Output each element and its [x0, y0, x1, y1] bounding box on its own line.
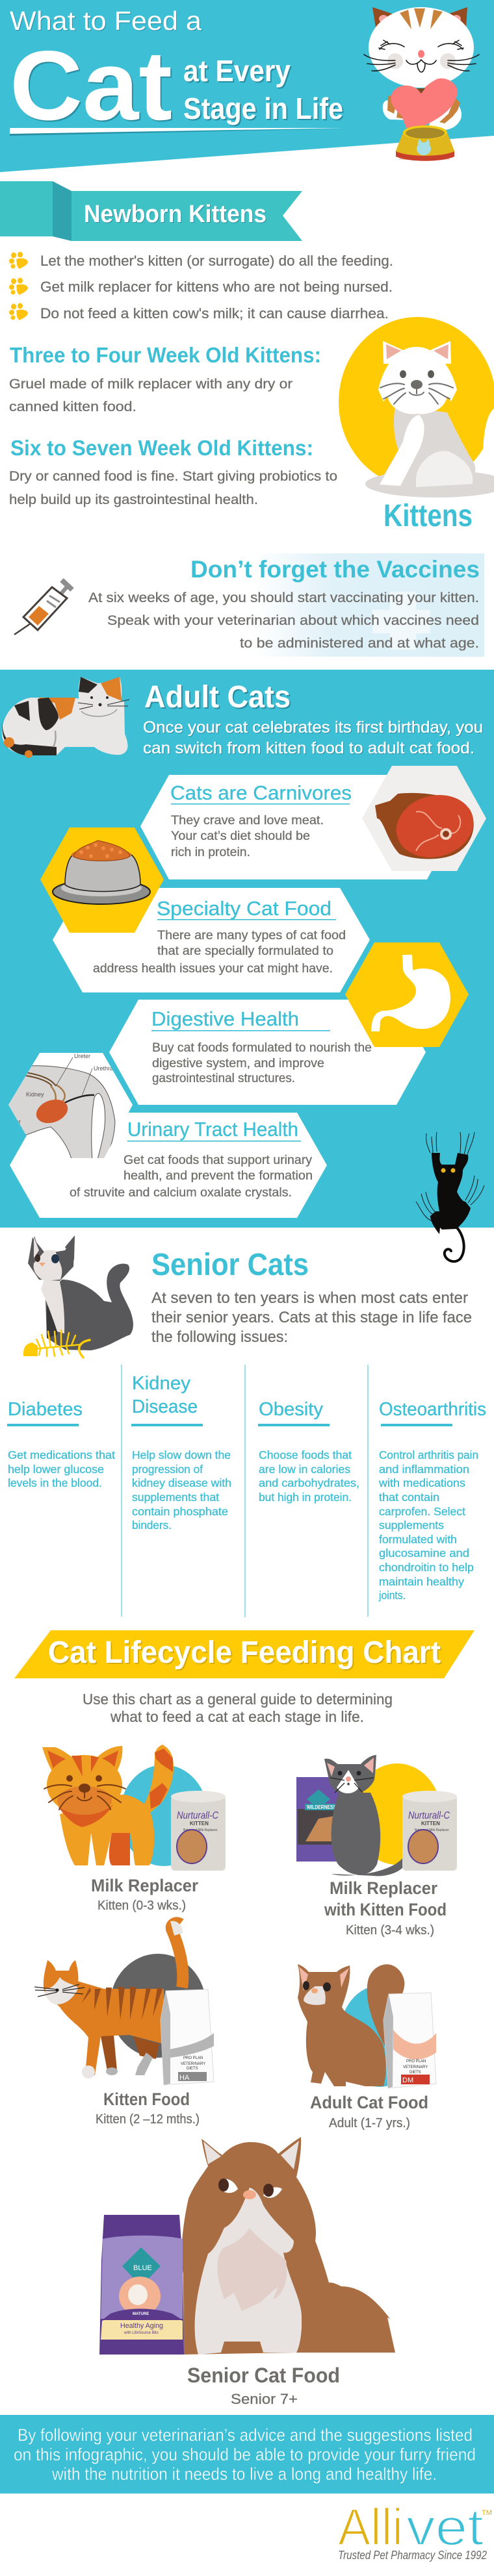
column: Kidney Disease: supplements that: [132, 1491, 219, 1504]
icon: white food bag: PRO PLAN: [406, 2060, 426, 2064]
text block: senior cats: At seven to ten years is when most cats enter: [151, 1289, 468, 1307]
sublabel: Adult (1-7 yrs.): [329, 2116, 410, 2130]
icon: senior food bag: MATURE: [133, 2312, 149, 2316]
tip 3: Do not feed a kitten cow's milk; it can cause diarrhea.: [40, 305, 389, 322]
chart intro text: what to feed a cat at each stage in life.: [110, 1708, 364, 1725]
title: at Every: [183, 54, 291, 88]
icon: paw: [9, 303, 28, 320]
icon: stomach in yellow hexagon: [345, 942, 469, 1047]
icon: senior food bag: BLUE: [133, 2264, 152, 2272]
title: Cat: [10, 31, 172, 141]
text block: senior cats: their senior years. Cats at this stage in life face: [151, 1309, 472, 1326]
text block: senior cats: [151, 1248, 472, 1346]
icon: milk replacer can: [402, 1791, 457, 1871]
sublabel: Kitten (0-3 wks.): [98, 1899, 186, 1913]
column: Obesity: [258, 1399, 359, 1504]
column: Osteoarthritis: supplements: [379, 1519, 444, 1532]
icon: milk replacer can: KITTEN: [190, 1821, 209, 1826]
title: What to Feed a: [10, 6, 202, 36]
logo: Allivet: [338, 2498, 492, 2562]
column: Obesity: and carbohydrates,: [259, 1476, 359, 1489]
body text: Your cat’s diet should be: [171, 829, 310, 843]
column: Osteoarthritis: Osteoarthritis: [379, 1399, 486, 1420]
illustration: tabby cat and bag: [34, 1921, 214, 2085]
title: [10, 6, 343, 141]
icon: milk replacer can: Balanced Milk Replacer: [183, 1828, 218, 1832]
icon: milk replacer can: Balanced Milk Replacer: [415, 1828, 449, 1832]
panel: cats are carnivores: [140, 766, 486, 879]
illustration: grey cat, food bag and can: WILDERNESS: [307, 1804, 337, 1810]
icon: white food bag: PRO PLAN: [183, 2056, 203, 2060]
text block: adult cats intro: Adult Cats: [144, 680, 291, 714]
body text: address health issues your cat might have.: [93, 962, 333, 976]
icon: urinary anatomy hexagon: Urethra: [94, 1065, 113, 1072]
logo: Allivet: TM: [482, 2509, 492, 2517]
illustration: grey cat, food bag and can: [296, 1755, 457, 1876]
body text: [70, 1154, 313, 1200]
text block: adult cats intro: Once your cat celebrates its first birthday, you: [143, 718, 483, 737]
column: Diabetes: [7, 1399, 115, 1489]
illustration: orange kitten and can: [42, 1745, 226, 1871]
column: Obesity: are low in calories: [259, 1463, 350, 1476]
column: Kidney Disease: kidney disease with: [132, 1476, 231, 1489]
illustration: senior tuxedo cat with fish bone: [23, 1235, 133, 1357]
column: Osteoarthritis: joints.: [378, 1589, 406, 1602]
icon: syringe: [14, 580, 72, 635]
text block: adult cats intro: [143, 680, 483, 757]
column: Kidney Disease: Kidney: [132, 1373, 191, 1394]
logo: Allivet: vet: [406, 2498, 484, 2556]
icon: urinary anatomy hexagon: Ureter: [74, 1053, 90, 1059]
heading: Digestive Health: [151, 1007, 299, 1030]
sublabel: Kitten (2 –12 mths.): [96, 2112, 200, 2127]
column: Osteoarthritis: and inflammation: [379, 1463, 469, 1476]
banner: Cat Lifecycle Feeding Chart: [14, 1630, 474, 1678]
illustration: black cat clawing down: [416, 1132, 484, 1261]
icon: urinary anatomy hexagon: Kidney: [26, 1091, 44, 1098]
column: Obesity: but high in protein.: [259, 1491, 352, 1504]
icon: milk replacer can: Nurturall-C: [177, 1810, 218, 1821]
icon: white food bag: DIETS: [410, 2071, 421, 2075]
chart intro text: [83, 1691, 393, 1725]
column: Osteoarthritis: [378, 1399, 486, 1602]
icon: urinary anatomy hexagon: Bladder: [1, 1118, 21, 1125]
illustration: long-haired cat and bag: [99, 2137, 395, 2355]
illustration: white kitten on yellow circle: [339, 317, 494, 498]
column: Osteoarthritis: with medications: [378, 1476, 465, 1489]
text block: six to seven weeks: Dry or canned food is fine. Start giving probiotics to: [9, 469, 337, 484]
text block: vaccines: Speak with your veterinarian about which vaccines need: [107, 613, 479, 628]
column: Diabetes: levels in the blood.: [8, 1476, 102, 1489]
text block: adult cats intro: can switch from kitten food to adult cat food.: [143, 739, 474, 757]
heading: Specialty Cat Food: [157, 897, 332, 920]
icon: food bowl in yellow hexagon: [40, 827, 164, 933]
label: Kittens: Kittens: [384, 499, 473, 533]
column: Kidney Disease: Help slow down the: [132, 1448, 231, 1461]
label: Kitten Food: [103, 2090, 190, 2109]
body text: [152, 1041, 372, 1085]
banner: Cat Lifecycle Feeding Chart: Cat Lifecycle Feeding Chart: [48, 1635, 441, 1670]
icon: white food bag: VETERINARY: [403, 2065, 428, 2069]
vaccines background: [252, 553, 484, 657]
text block: three to four weeks: canned kitten food.: [9, 399, 136, 414]
heading: Urinary Tract Health: [127, 1118, 298, 1141]
label: Milk Replacer: [91, 1876, 198, 1895]
text block: six to seven weeks: [9, 436, 337, 507]
body text: They crave and love meat.: [171, 814, 324, 827]
footer band: with the nutrition it needs to live a long and healthy life.: [51, 2464, 437, 2484]
body text: rich in protein.: [171, 846, 250, 859]
sublabel: Kitten (3-4 wks.): [346, 1923, 434, 1938]
icon: white food bag: HA: [179, 2074, 190, 2082]
body text: Buy cat foods formulated to nourish the: [152, 1041, 372, 1055]
banner: Newborn Kittens: Newborn Kittens: [84, 201, 266, 228]
stage: adult cat food: [298, 1964, 436, 2130]
body text: [171, 814, 324, 859]
panel: urinary tract health: [10, 1113, 327, 1218]
icon: ham in hexagon: [362, 766, 486, 871]
icon: milk replacer can: KITTEN: [421, 1821, 440, 1826]
icon: senior food bag: [99, 2215, 184, 2355]
column: Obesity: Choose foods that: [259, 1448, 352, 1461]
label: Senior Cat Food: [187, 2364, 340, 2387]
stage: kitten food: [34, 1921, 214, 2127]
stage: senior cat food: [99, 2137, 395, 2407]
icon: white food bag: DIETS: [187, 2067, 198, 2071]
column: Osteoarthritis: glucosamine and: [379, 1547, 469, 1559]
icon: white food bag: DM: [402, 2077, 413, 2084]
column: Osteoarthritis: that contain: [379, 1491, 439, 1504]
list: newborn kitten tips: [9, 252, 393, 322]
text block: vaccines: to be administered and at what age.: [240, 636, 479, 651]
text block: three to four weeks: [9, 343, 321, 414]
column: Diabetes: Get medications that: [8, 1448, 115, 1461]
heading: Cats are Carnivores: [170, 781, 352, 804]
body text: of struvite and calcium oxalate crystals.: [70, 1186, 292, 1200]
footer band: [0, 2415, 494, 2494]
column: Osteoarthritis: maintain healthy: [379, 1575, 464, 1588]
column: Osteoarthritis: Control arthritis pain: [379, 1448, 478, 1461]
logo: Allivet: Alli: [338, 2498, 403, 2556]
body text: There are many types of cat food: [157, 929, 346, 942]
text block: senior cats: the following issues:: [151, 1328, 288, 1346]
stage: milk replacer: [42, 1745, 226, 1913]
text block: vaccines: Don’t forget the Vaccines: [190, 556, 480, 583]
illustration: brown cat and bag: [298, 1964, 436, 2088]
column: Diabetes: help lower glucose: [8, 1463, 104, 1476]
illustration: calico cat: [2, 677, 129, 758]
label: Milk Replacer: [330, 1878, 437, 1898]
text block: senior cats: Senior Cats: [151, 1248, 309, 1282]
column: Kidney Disease: progression of: [132, 1463, 203, 1476]
icon: urinary anatomy hexagon: [8, 1053, 133, 1158]
banner: Newborn Kittens: [0, 181, 302, 241]
column: Osteoarthritis: carprofen. Select: [379, 1505, 465, 1518]
icon: white food bag: VETERINARY: [181, 2062, 205, 2066]
icon: white food bag: [161, 1989, 214, 2085]
header background: [0, 0, 494, 172]
tip 2: Get milk replacer for kittens who are not being nursed.: [40, 279, 393, 295]
label: [324, 1878, 447, 1919]
text block: six to seven weeks: Six to Seven Week Old Kittens:: [10, 436, 313, 460]
column: Diabetes: Diabetes: [8, 1399, 83, 1420]
body text: [93, 929, 346, 976]
label: with Kitten Food: [324, 1900, 447, 1919]
column: Kidney Disease: Disease: [132, 1396, 198, 1417]
icon: senior food bag: Healthy Aging: [120, 2322, 163, 2330]
text block: vaccines: At six weeks of age, you should start vaccinating your kitten.: [88, 590, 479, 605]
text block: vaccines: [88, 556, 480, 651]
stage: milk replacer with kitten food: [296, 1755, 457, 1938]
tip 1: Let the mother's kitten (or surrogate) do all the feeding.: [40, 253, 393, 269]
column: Kidney Disease: [131, 1373, 231, 1532]
icon: paw: [9, 252, 28, 269]
panel: specialty cat food: [53, 888, 370, 992]
icon: milk replacer can: Nurturall-C: [408, 1810, 450, 1821]
body text: gastrointestinal structures.: [152, 1072, 295, 1085]
column: Obesity: Obesity: [259, 1399, 323, 1420]
icon: paw: [9, 278, 28, 295]
column: Osteoarthritis: chondroitin to help: [379, 1561, 474, 1574]
icon: senior food bag: with LifeSource Bits: [124, 2331, 159, 2335]
text block: three to four weeks: Gruel made of milk replacer with any dry or: [9, 377, 292, 392]
icon: white food bag: [384, 1993, 436, 2088]
column: Osteoarthritis: formulated with: [379, 1533, 457, 1546]
title: Stage in Life: [183, 92, 343, 125]
column: Kidney Disease: contain phosphate: [132, 1505, 228, 1518]
body text: that are specially formulated to: [157, 944, 333, 958]
text block: three to four weeks: Three to Four Week Old Kittens:: [10, 343, 321, 367]
body text: digestive system, and improve: [152, 1057, 324, 1070]
body text: Get cat foods that support urinary: [124, 1154, 312, 1167]
label: Adult Cat Food: [310, 2093, 428, 2112]
text block: six to seven weeks: help build up its gastrointestinal health.: [9, 492, 258, 507]
panel: adult cats background: [0, 670, 494, 1228]
body text: health, and prevent the formation: [124, 1169, 313, 1183]
icon: kitten hugging heart with food bowl: [364, 7, 479, 161]
panel: digestive health: [109, 1000, 426, 1105]
chart intro text: Use this chart as a general guide to determining: [83, 1691, 393, 1708]
column: Kidney Disease: binders.: [132, 1519, 172, 1532]
icon: milk replacer can: [171, 1791, 226, 1871]
sublabel: Senior 7+: [231, 2391, 298, 2407]
